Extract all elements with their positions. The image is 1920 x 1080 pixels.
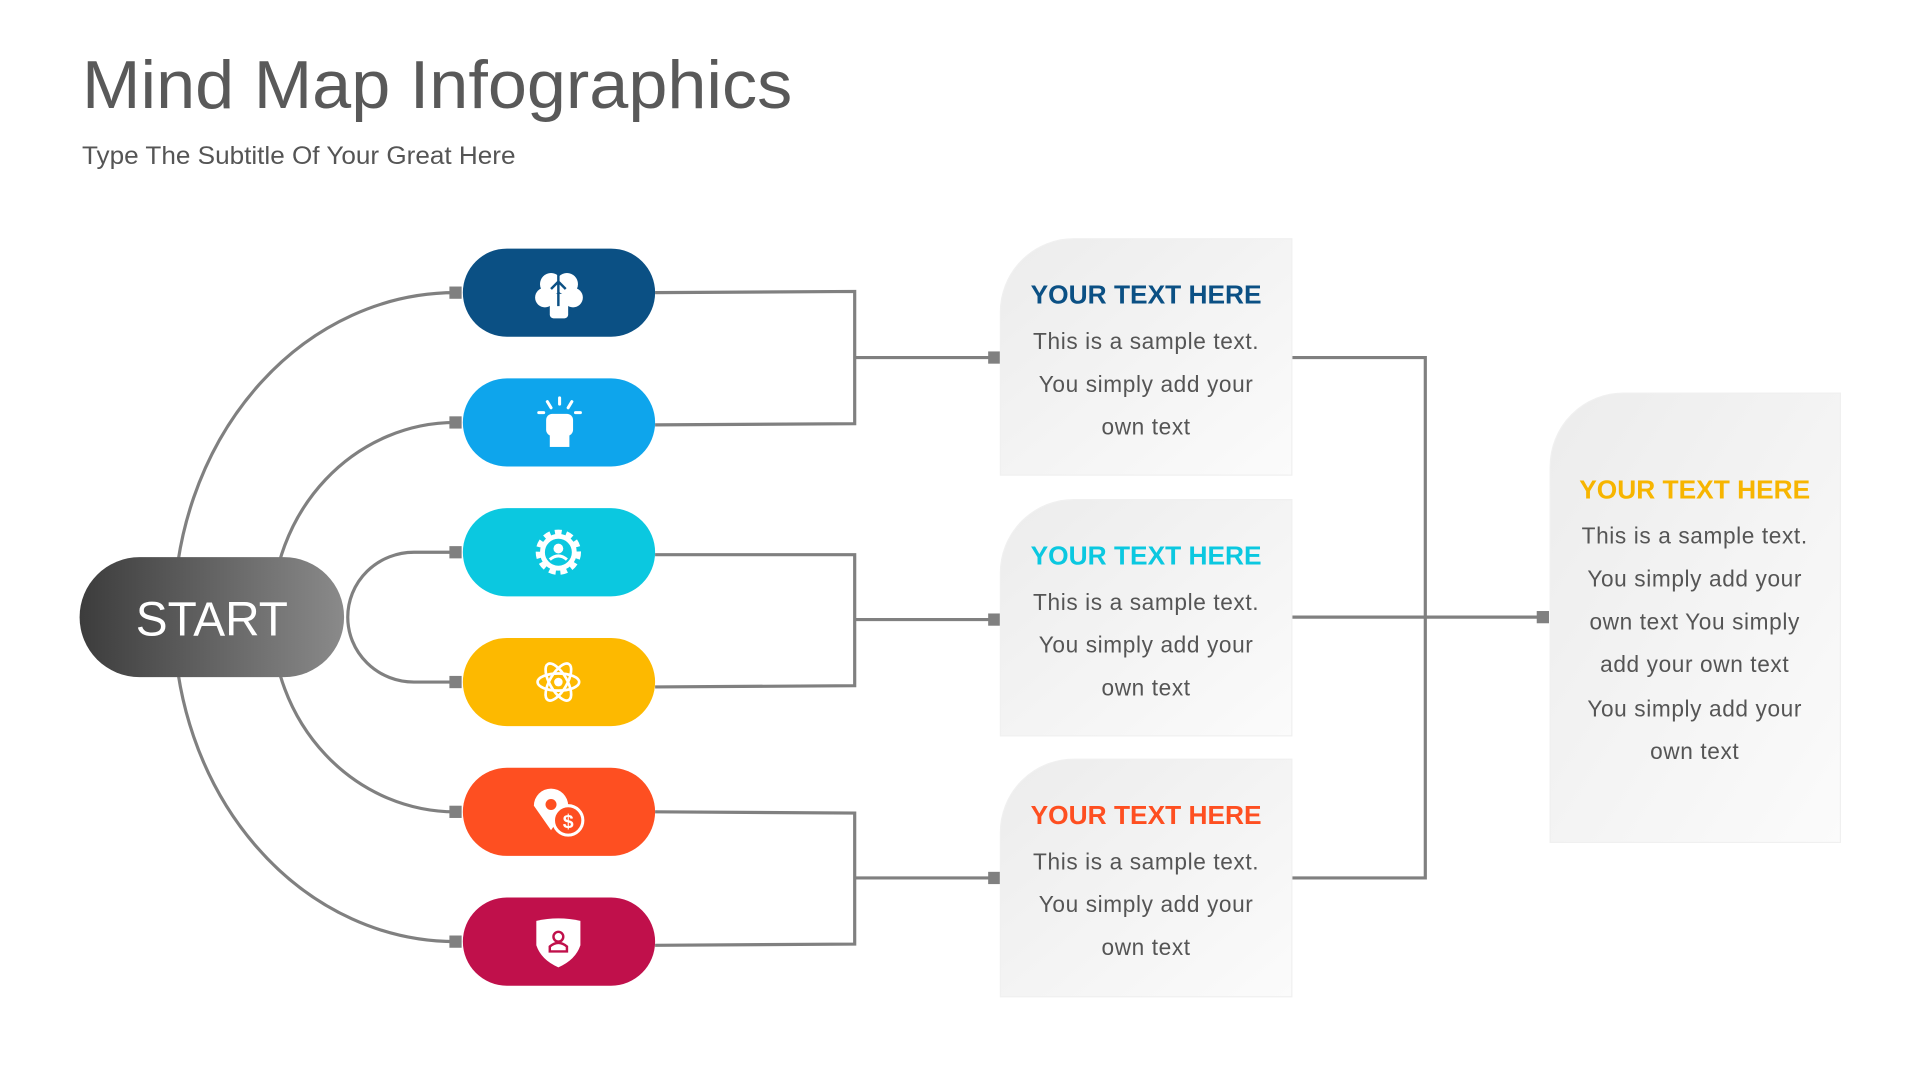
card 2: YOUR TEXT HERE — [1031, 540, 1262, 570]
pill: fist idea — [463, 378, 655, 467]
card: summary: add your own text — [1600, 651, 1789, 677]
pill: gear user — [463, 508, 655, 596]
card: summary: own text — [1650, 738, 1739, 764]
arrows: left arcs — [174, 293, 460, 942]
card: summary: own text You simply — [1589, 608, 1800, 634]
card 1: YOUR TEXT HERE — [1031, 280, 1262, 310]
start node: START — [136, 594, 288, 647]
card 2: You simply add your — [1039, 632, 1253, 658]
pill: location dollar: $ — [563, 811, 574, 833]
card 1: This is a sample text. — [1033, 328, 1259, 354]
connector squares — [449, 287, 1549, 948]
card 2: own text — [1102, 675, 1191, 701]
card: summary: YOUR TEXT HERE — [1579, 474, 1810, 504]
card: summary — [1550, 393, 1840, 842]
subtitle: Type The Subtitle Of Your Great Here — [82, 142, 516, 170]
title: Mind Map Infographics — [82, 48, 792, 123]
start node — [80, 557, 344, 677]
card 3: own text — [1102, 934, 1191, 960]
card 2: This is a sample text. — [1033, 589, 1259, 615]
pill: atom — [463, 638, 655, 726]
card 3: This is a sample text. — [1033, 848, 1259, 874]
card 3: You simply add your — [1039, 891, 1253, 917]
card 3 — [1000, 759, 1292, 997]
card 3: YOUR TEXT HERE — [1031, 800, 1262, 830]
card 1: You simply add your — [1039, 371, 1253, 397]
card 2 — [1000, 500, 1292, 736]
card 1: own text — [1102, 414, 1191, 440]
pill: brain — [463, 249, 655, 337]
pill: location dollar — [463, 768, 655, 856]
card: summary: You simply add your — [1587, 695, 1802, 721]
arrows: right connectors — [655, 291, 1543, 945]
card: summary: You simply add your — [1587, 566, 1802, 592]
pill: shield user — [463, 898, 655, 986]
card: summary: This is a sample text. — [1582, 523, 1808, 549]
card 1 — [1000, 239, 1292, 475]
